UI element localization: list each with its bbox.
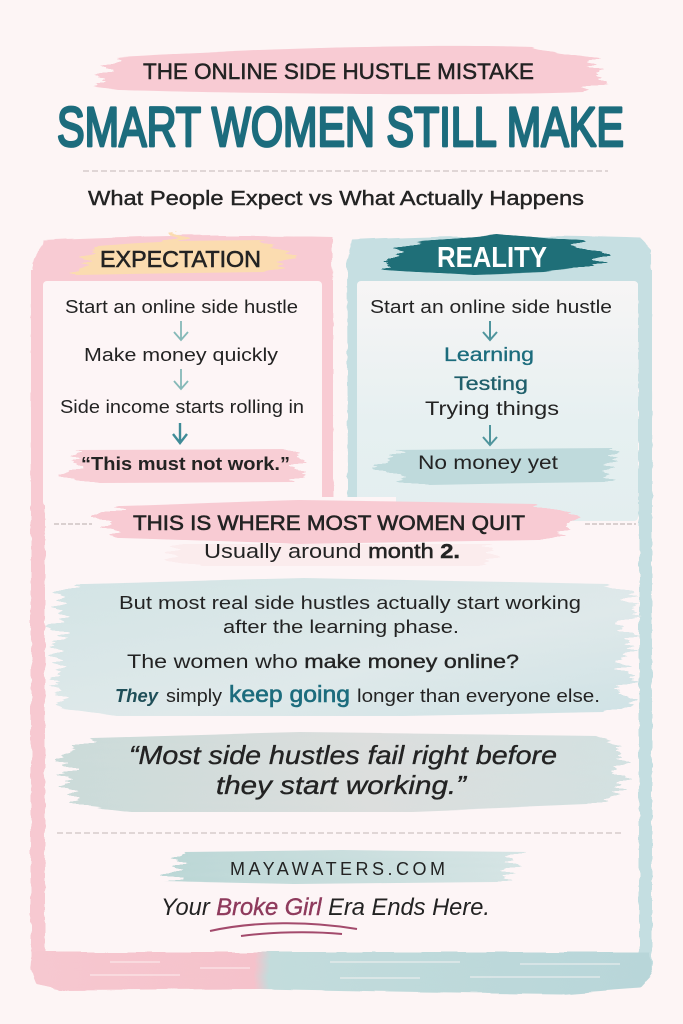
arrow: [483, 425, 497, 445]
tagline: Your Broke Girl Era Ends Here.: [161, 894, 490, 921]
frame: left strip: [31, 480, 45, 970]
arrow: [173, 423, 187, 443]
header: title block: [57, 46, 624, 158]
blue brush callout: [385, 448, 612, 485]
pink brush callout: [70, 449, 304, 483]
title brush stroke: [100, 46, 600, 94]
website: MAYAWATERS.COM: [230, 859, 445, 879]
explanation line 2: after the learning phase.: [223, 617, 459, 637]
pink brush: [104, 500, 574, 544]
reality panel background: [347, 236, 652, 500]
pale brush under text: [170, 544, 494, 566]
step: learning: Learning: [444, 345, 534, 366]
step: side income: Side income starts rolling in: [60, 397, 304, 417]
callout text: “This must not work.”: [81, 454, 290, 474]
step: testing: Testing: [454, 374, 528, 395]
reality label brush: [392, 234, 600, 275]
step: make money: Make money quickly: [84, 345, 278, 365]
outer frame: [30, 480, 652, 994]
sub text: Usually around month 2.: [204, 541, 460, 563]
step: trying things: Trying things: [425, 399, 559, 420]
panel: explanation: [56, 578, 630, 716]
arrow: [174, 369, 188, 389]
blue brush: [56, 578, 630, 716]
reality inner card: [357, 281, 638, 521]
step: start: Start an online side hustle: [65, 297, 298, 317]
expectation panel background: [31, 236, 333, 500]
subtitle: What People Expect vs What Actually Happens: [88, 188, 584, 210]
callout text: No money yet: [418, 453, 559, 474]
expectation inner card: [43, 281, 322, 506]
website brush: [170, 850, 515, 884]
quote brush: [66, 732, 622, 812]
expectation label brush: [76, 231, 292, 275]
quote line 1: “Most side hustles fail right before: [129, 740, 557, 770]
panel: reality: [347, 234, 652, 521]
step: start: Start an online side hustle: [370, 297, 612, 317]
panel: quote: [66, 732, 622, 812]
expectation label: EXPECTATION: [100, 246, 261, 272]
dashes right: [585, 523, 636, 525]
explanation line 1: But most real side hustles actually start working: [119, 593, 581, 613]
cover for panel bottoms: [46, 497, 396, 562]
frame: inner paper: [46, 560, 638, 950]
frame: bottom band: [30, 952, 652, 994]
reality label: REALITY: [437, 242, 547, 274]
explanation line 4: keep going: keep going: [229, 681, 350, 707]
arrow: [174, 321, 188, 340]
tagline underline: [210, 923, 357, 936]
title line one: THE ONLINE SIDE HUSTLE MISTAKE: [143, 59, 534, 84]
quote line 2: they start working.”: [216, 770, 468, 800]
callout: where most women quit: [46, 497, 638, 566]
frame: right strip: [639, 480, 652, 970]
explanation line 4: they: They: [115, 686, 159, 706]
panel: expectation: [31, 231, 333, 510]
explanation line 3: The women who make money online?: [127, 652, 519, 673]
dashes left: [54, 523, 92, 525]
explanation line 4: remainder: longer than everyone else.: [357, 686, 600, 706]
footer: [161, 850, 515, 936]
heading: THIS IS WHERE MOST WOMEN QUIT: [133, 512, 525, 535]
explanation line 4: simply: simply: [166, 686, 222, 706]
arrow: [483, 321, 497, 340]
